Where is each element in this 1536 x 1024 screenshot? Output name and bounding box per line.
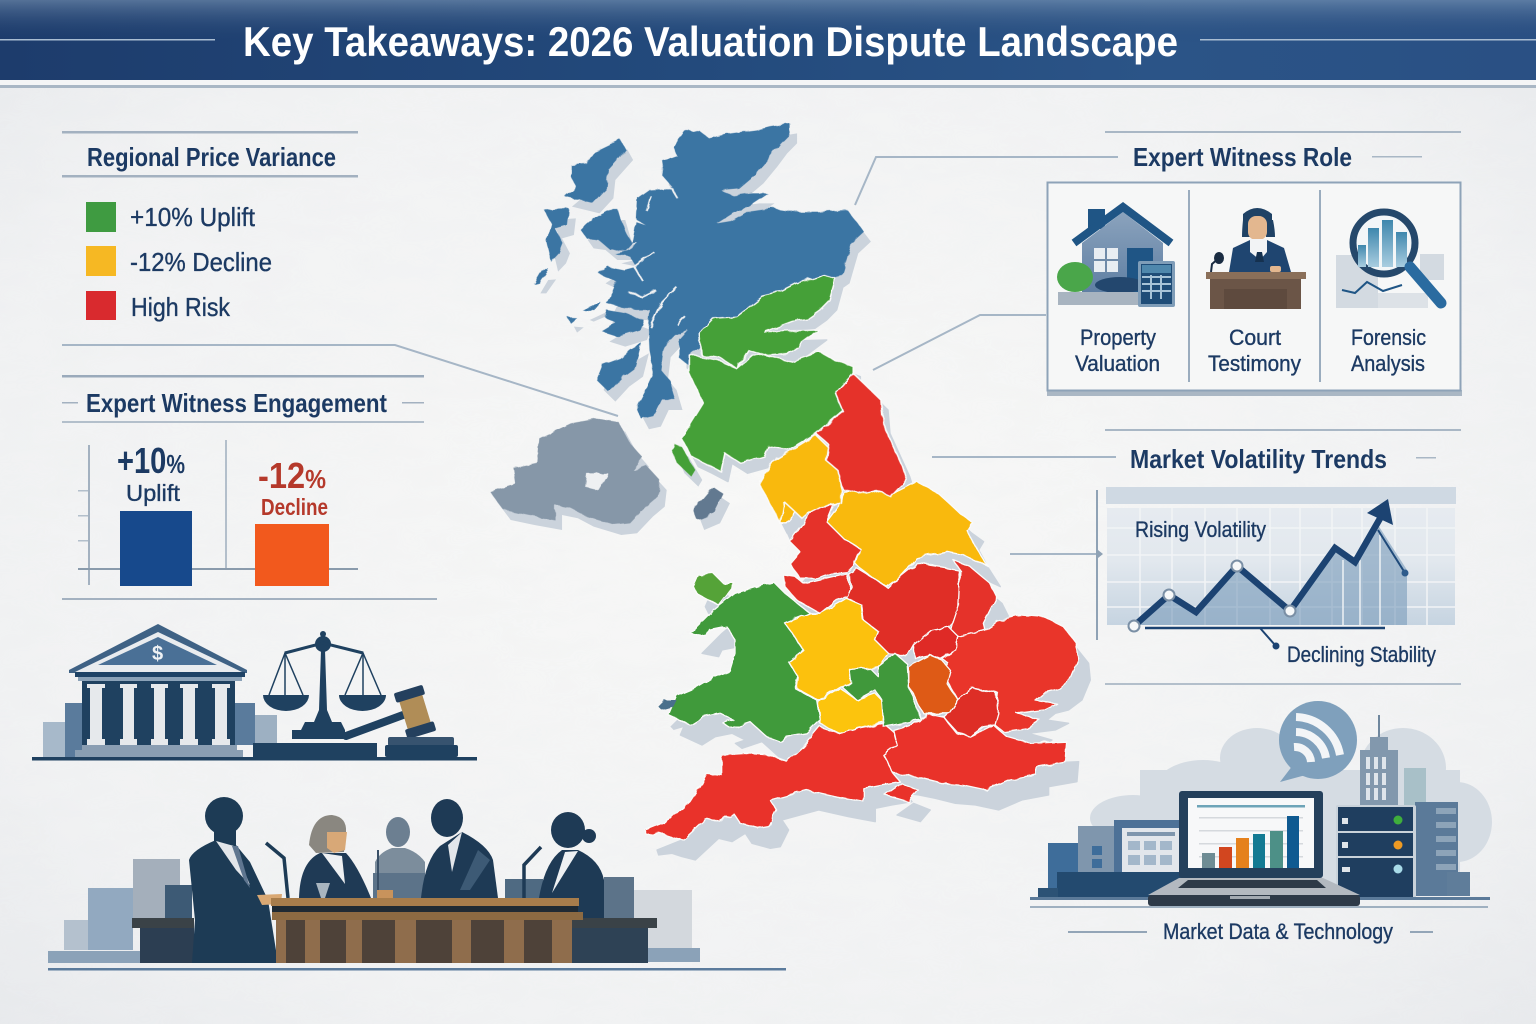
bar: decline bbox=[255, 524, 329, 586]
sea lochs bbox=[628, 188, 685, 327]
figure: rear man bbox=[373, 817, 425, 898]
label: uplift value: +10% bbox=[117, 440, 185, 481]
server rack bbox=[1336, 805, 1416, 898]
pediment bbox=[69, 624, 247, 673]
stability line bbox=[1145, 628, 1385, 650]
leader lines bbox=[62, 157, 1118, 554]
panel: market volatility trends bbox=[1096, 429, 1461, 685]
Highlands and islands bbox=[533, 123, 864, 419]
label: forensic analysis: Analysis bbox=[1351, 351, 1425, 376]
trend line bbox=[1134, 515, 1382, 626]
heading: Expert Witness Engagement bbox=[86, 388, 387, 418]
office blocks bbox=[1038, 820, 1182, 898]
England and Wales regions bbox=[645, 480, 1078, 840]
label: forensic analysis bbox=[1351, 325, 1426, 376]
Scotland and Northern England regions bbox=[490, 123, 907, 525]
legend: high risk: High Risk bbox=[131, 292, 231, 322]
illustration: market data and technology bbox=[1030, 701, 1492, 944]
pediment: $ bbox=[152, 643, 163, 665]
Northern Ireland bbox=[490, 418, 660, 525]
figure: seated woman bbox=[299, 815, 371, 898]
label: court testimony: Testimony bbox=[1208, 351, 1301, 376]
icon: house with calculator bbox=[1057, 207, 1175, 307]
Isle of Man bbox=[693, 487, 723, 520]
legend: decline: -12% Decline bbox=[130, 247, 272, 277]
legend: high risk bbox=[86, 291, 231, 322]
label: rising volatility: Rising Volatility bbox=[1135, 517, 1266, 542]
label: decline: Decline bbox=[261, 494, 328, 520]
label: property valuation: Valuation bbox=[1075, 351, 1160, 376]
secondary decline line bbox=[1378, 530, 1408, 576]
tower bbox=[1360, 715, 1470, 896]
heading: Market Volatility Trends bbox=[1130, 444, 1387, 474]
legend: decline bbox=[86, 246, 272, 277]
caption: Market Data & Technology bbox=[1163, 919, 1393, 944]
bench bbox=[271, 898, 583, 963]
label: property valuation: Property bbox=[1080, 325, 1156, 350]
title banner bbox=[0, 0, 1536, 88]
illustration: courthouse and scales of justice bbox=[32, 624, 477, 760]
heading: Expert Witness Role bbox=[1133, 142, 1352, 172]
arrow head bbox=[1367, 499, 1393, 525]
label: decline value: -12% bbox=[258, 455, 326, 496]
panel: expert witness engagement bbox=[62, 375, 437, 600]
label: property valuation bbox=[1075, 325, 1160, 376]
line chart bbox=[1096, 487, 1456, 650]
label: declining stability: Declining Stability bbox=[1287, 642, 1436, 667]
bar chart bbox=[78, 440, 358, 586]
label: uplift: Uplift bbox=[126, 480, 181, 506]
scales bbox=[263, 631, 386, 739]
left desk bbox=[132, 918, 194, 963]
UK map bbox=[490, 123, 1078, 840]
panel: expert witness role bbox=[1047, 131, 1462, 396]
figure: suited man bbox=[421, 799, 498, 898]
icon: court testimony bbox=[1206, 208, 1306, 309]
gavel bbox=[346, 685, 436, 739]
microphone: left bbox=[266, 843, 288, 898]
bar: uplift bbox=[120, 511, 192, 586]
title text: Key Takeaways: 2026 Valuation Dispute Landscape bbox=[243, 18, 1178, 65]
panel: regional price variance legend bbox=[62, 131, 358, 322]
icon: magnifier over chart bbox=[1336, 212, 1444, 308]
label: forensic analysis: Forensic bbox=[1351, 325, 1426, 350]
label: court testimony: Court bbox=[1229, 325, 1281, 350]
cloud backdrop bbox=[1090, 728, 1492, 885]
columns bbox=[87, 684, 230, 745]
speech bubble with signal bbox=[1279, 701, 1357, 782]
legend: uplift: +10% Uplift bbox=[130, 202, 256, 232]
label: court testimony bbox=[1208, 325, 1301, 376]
figure: standing man bbox=[189, 797, 282, 963]
laptop with bar chart bbox=[1148, 791, 1360, 906]
card frame bbox=[1047, 182, 1462, 396]
right desk bbox=[572, 918, 657, 963]
figure: woman on right bbox=[524, 812, 604, 918]
illustration: courtroom scene bbox=[48, 797, 786, 970]
heading: Regional Price Variance bbox=[87, 142, 336, 172]
map shadow bbox=[490, 123, 1078, 840]
